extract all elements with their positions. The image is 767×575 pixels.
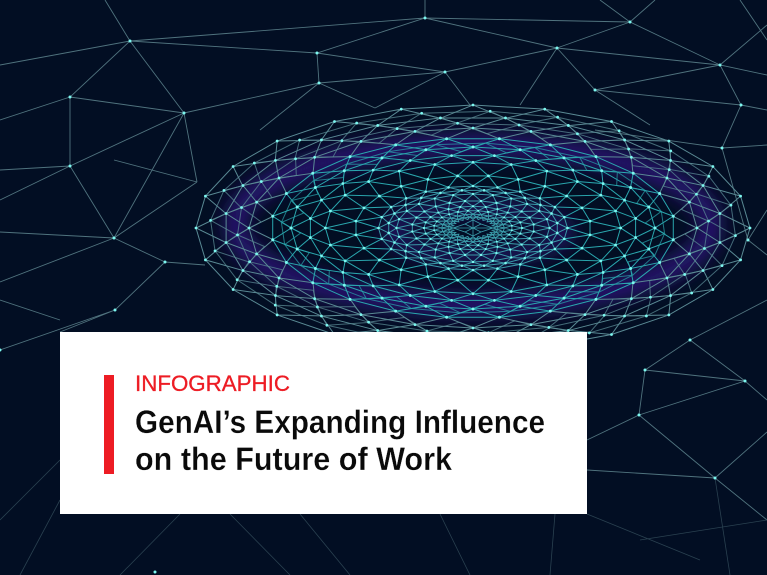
red accent bar	[104, 375, 114, 474]
heading	[135, 404, 545, 477]
outer mesh rings	[193, 103, 753, 353]
elliptical mesh	[193, 103, 753, 353]
eyebrow label: INFOGRAPHIC	[135, 371, 290, 396]
title card	[60, 332, 587, 514]
inner mesh rings	[378, 185, 568, 271]
mesh nodes	[193, 103, 753, 353]
faint lower network lines	[0, 460, 767, 575]
heading: GenAI’s Expanding Influence	[135, 404, 545, 440]
purple glow bands	[235, 145, 711, 305]
heading: on the Future of Work	[135, 441, 453, 477]
teal mesh rings	[246, 127, 700, 329]
mesh centre patch	[453, 220, 493, 236]
